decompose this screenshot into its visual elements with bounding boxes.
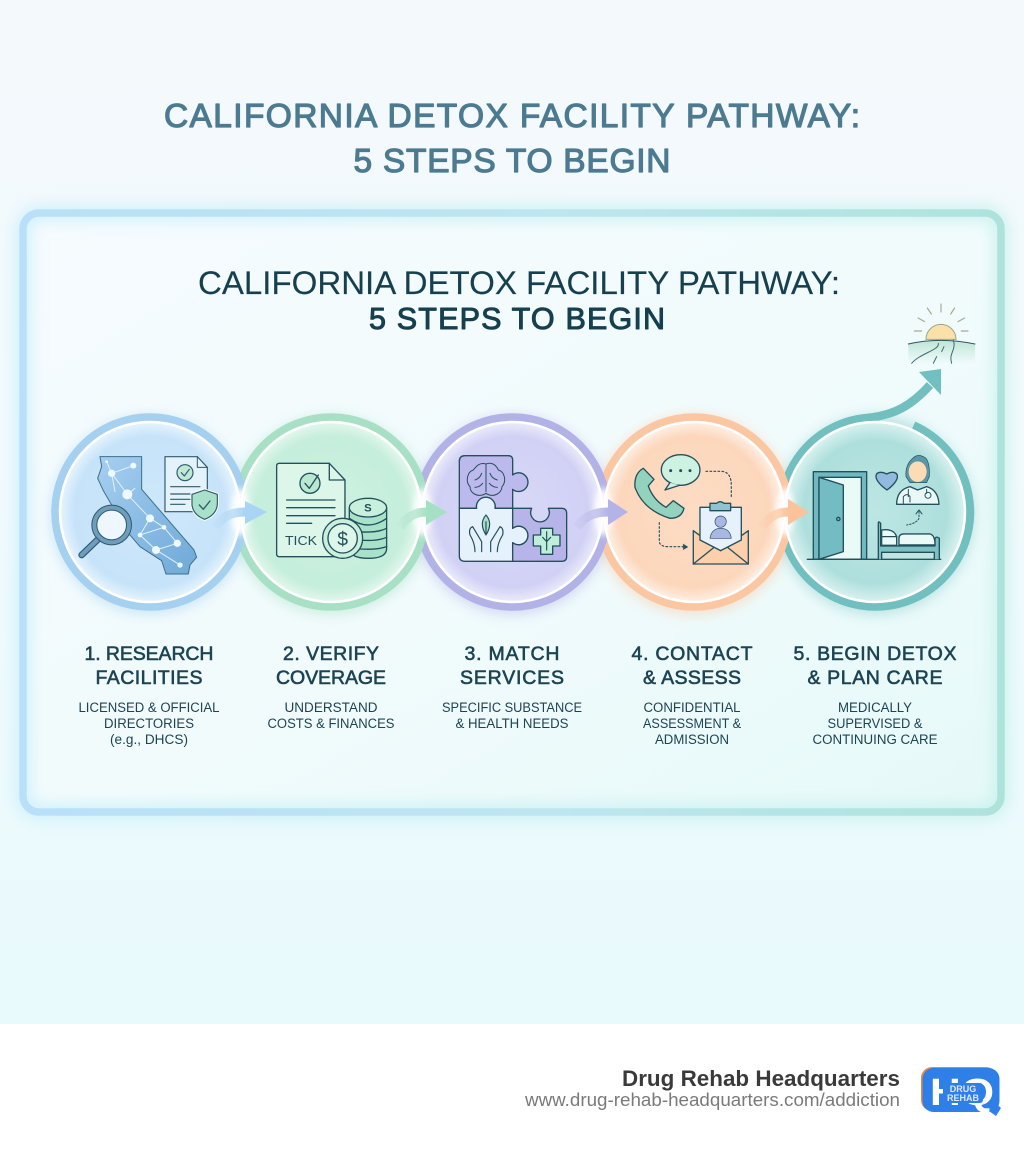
step 3 ring	[418, 418, 607, 606]
step 5 label: MEDICALLY	[838, 700, 912, 715]
main title	[164, 98, 860, 180]
footer brand text: Drug Rehab Headquarters	[622, 1066, 900, 1091]
step 5 label: 5. BEGIN DETOX	[794, 643, 956, 665]
step 5 disc	[785, 422, 965, 602]
step 5 label: CONTINUING CARE	[812, 732, 938, 747]
arrow: step 3 to 4	[577, 488, 628, 536]
panel heading: 5 STEPS TO BEGIN	[369, 302, 665, 336]
step 2 disc	[241, 422, 421, 602]
icon: phone, speech bubble and envelope	[635, 455, 748, 564]
icon: coverage document with coins: $	[337, 529, 348, 550]
icon: California map with magnifier and document	[82, 457, 217, 574]
logo: HQ	[930, 1072, 994, 1114]
main title: 5 STEPS TO BEGIN	[354, 143, 670, 180]
main title: CALIFORNIA DETOX FACILITY PATHWAY:	[164, 98, 860, 135]
step 5 label: & PLAN CARE	[808, 667, 942, 689]
step 1 label: 1. RESEARCH	[84, 643, 214, 665]
footer brand text: www.drug-rehab-headquarters.com/addiction	[524, 1090, 900, 1110]
step 2 label: COVERAGE	[276, 667, 386, 689]
step 3 label: 3. MATCH	[464, 643, 560, 665]
step 1 label	[78, 643, 220, 747]
step 4 disc	[604, 422, 784, 602]
step 5 label: SUPERVISED &	[828, 716, 922, 731]
step 3 label: SPECIFIC SUBSTANCE	[442, 700, 582, 715]
step 4 label: ASSESSMENT &	[643, 716, 741, 731]
icon: coverage document with coins	[277, 463, 387, 558]
step 4 label: 4. CONTACT	[632, 643, 753, 665]
step 3 label: SERVICES	[460, 667, 564, 689]
step 4 label: & ASSESS	[643, 667, 741, 689]
step 2 ring	[236, 418, 426, 606]
logo: DRUG	[950, 1084, 976, 1094]
step 4 label	[632, 643, 753, 747]
step 1 label: (e.g., DHCS)	[110, 732, 188, 747]
logo: REHAB	[947, 1093, 979, 1103]
panel heading	[198, 265, 840, 336]
step 2 label: UNDERSTAND	[284, 700, 378, 715]
circle glows	[50, 415, 975, 615]
step 1 label: FACILITIES	[96, 667, 202, 689]
step 2 label: COSTS & FINANCES	[268, 716, 394, 731]
icon: door, bed, heart and doctor	[807, 455, 941, 559]
step 5 label	[794, 643, 956, 747]
arrow: step 1 to 2	[215, 488, 267, 536]
step 1 label: LICENSED & OFFICIAL	[78, 700, 220, 715]
panel: pathway frame	[23, 213, 1001, 812]
step 2 label	[268, 643, 394, 731]
step 1 disc	[60, 422, 240, 602]
arrow: step 2 to 3	[400, 488, 447, 536]
icon: puzzle of brain, care and medical cross	[459, 456, 567, 561]
step 3 label: & HEALTH NEEDS	[456, 716, 568, 731]
step 2 label: 2. VERIFY	[283, 643, 379, 665]
step 1 ring	[56, 418, 244, 606]
footer band	[0, 1024, 1024, 1154]
footer brand text	[524, 1066, 900, 1110]
icon: sunrise over winding road	[908, 304, 975, 363]
step 4 ring	[600, 418, 788, 606]
logo	[921, 1067, 1001, 1116]
step 4 label: ADMISSION	[655, 732, 729, 747]
icon: coverage document with coins: S	[364, 502, 372, 514]
panel heading: CALIFORNIA DETOX FACILITY PATHWAY:	[198, 265, 840, 301]
icon: coverage document with coins: TICK	[285, 533, 317, 548]
step 1 label: DIRECTORIES	[104, 716, 194, 731]
step 3 label	[442, 643, 582, 731]
arrow: step 4 to 5	[762, 488, 809, 536]
step 3 disc	[422, 422, 602, 602]
step 4 label: CONFIDENTIAL	[644, 700, 741, 715]
step 5 ring with rising arrow	[781, 369, 970, 607]
